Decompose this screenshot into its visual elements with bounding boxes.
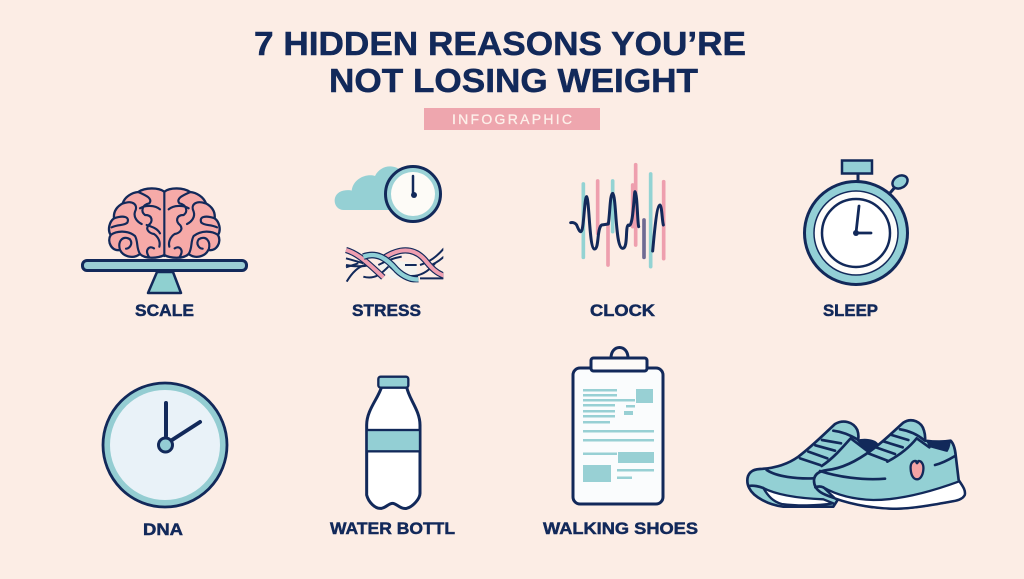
brain [109,188,220,258]
icon: water bottle [367,377,420,508]
back shoe [747,422,878,507]
clipboard lines [583,389,654,482]
label: water bottle: WATER BOTTL [330,519,455,538]
label: clock: CLOCK [590,301,656,320]
icon: wall clock [103,383,227,507]
label: dna: DNA [143,520,183,539]
icon: waveform bars [571,165,664,267]
icon: stopwatch [804,160,910,284]
scale base [148,272,181,293]
pink strand [346,250,383,277]
icon: brain on scale [82,188,246,293]
teal and pink bars [583,165,664,267]
tag: infographic [424,108,600,130]
clock [386,166,440,222]
title: NOT LOSING WEIGHT [329,63,699,100]
pulse line [571,192,663,251]
teal strand [363,255,418,279]
cloud [335,166,413,210]
front shoe [814,420,965,509]
label: walking shoes: WALKING SHOES [543,519,698,538]
icon: clipboard [573,348,663,504]
title [254,26,746,100]
tag: infographic: INFOGRAPHIC [452,111,572,127]
icon: walking shoes [747,420,965,509]
shoe logo [911,461,923,479]
title: 7 HIDDEN REASONS YOU’RE [254,26,746,63]
label: stress: STRESS [352,301,421,320]
icon: cloud and clock [335,166,440,222]
label: sleep: SLEEP [823,301,878,320]
scale beam [82,260,246,270]
icon: dna strands [346,248,445,282]
label: scale: SCALE [135,301,194,320]
